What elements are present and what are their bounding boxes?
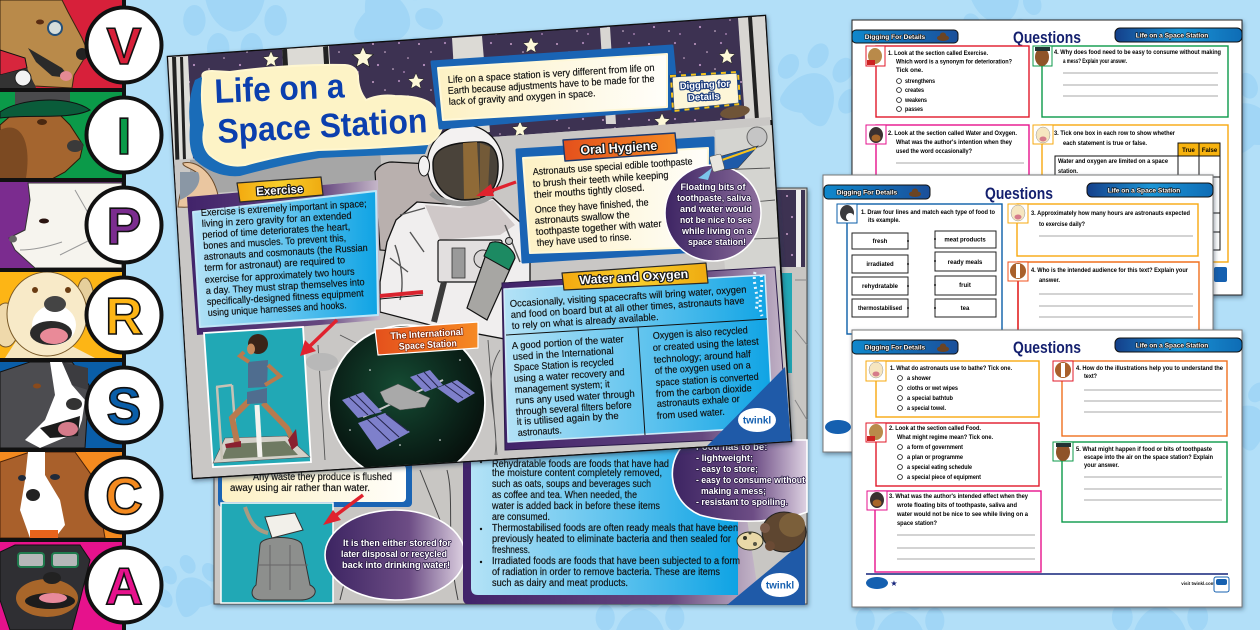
- question 3: [1008, 204, 1198, 256]
- toilet text box: away using air rather than water.: [230, 483, 370, 494]
- question 2: [866, 423, 1039, 486]
- oral hygiene text: astronauts swallow the: [534, 210, 631, 227]
- question 3: 3. Approximately how many hours are astronauts expected: [1031, 210, 1190, 217]
- exercise text: bones and muscles. To prevent this,: [203, 233, 346, 252]
- header: Life on a Space Station: [1115, 28, 1242, 42]
- water intro text: [510, 285, 747, 332]
- oxygen column: from used water.: [657, 407, 725, 422]
- purple fact circle: while living on a: [681, 226, 753, 237]
- question 2: [866, 125, 1029, 185]
- food panel: Thermostabilised foods are often ready meals that have been: [492, 523, 738, 534]
- food panel: [463, 440, 760, 604]
- water column: astronauts.: [518, 425, 562, 439]
- worksheet 1: [852, 20, 1242, 295]
- question 1: matching: ready meals: [948, 260, 983, 266]
- title cloud: [189, 65, 443, 176]
- question 3: to exercise daily?: [1039, 221, 1085, 228]
- purple fact circle: [665, 165, 761, 261]
- exercise text: [201, 199, 368, 319]
- bicep arm: [178, 162, 218, 207]
- exercise panel: [187, 177, 380, 335]
- toilet picture: [221, 503, 333, 603]
- water column: it is utilised again by the: [517, 411, 620, 428]
- food panel: freshness.: [492, 545, 530, 556]
- question 1: [866, 361, 1039, 417]
- header: Digging For Details: [852, 30, 958, 43]
- question 5: your answer.: [1084, 462, 1119, 469]
- water and oxygen panel: [502, 263, 788, 450]
- question 3 with true/false table: 3. Tick one box in each row to show whether: [1054, 130, 1176, 137]
- question 4: 4. Who is the intended audience for this text? Explain your: [1031, 267, 1189, 274]
- water and oxygen heading: Water and Oxygen: [579, 267, 689, 287]
- intro box: Earth because adjustments have to be made for the: [448, 74, 655, 97]
- machinery background: [172, 117, 791, 478]
- oxygen column: from the carbon dioxide: [656, 383, 753, 400]
- letter V: V: [107, 18, 142, 76]
- oval: stored or recycled: back into drinking water!: [342, 560, 450, 571]
- oval: food has to be: making a mess;: [701, 486, 766, 497]
- oral hygiene text: their mouths tightly closed.: [533, 183, 645, 201]
- oxygen column: [653, 325, 759, 422]
- question 2: a form of government: [907, 444, 963, 451]
- question 1: cloths or wet wipes: [907, 385, 958, 392]
- letter P: [86, 188, 162, 262]
- header: Life on a Space Station: Life on a Space Station: [1108, 188, 1180, 194]
- band S: collie: [0, 362, 122, 448]
- badge: Digging for Details: [671, 72, 751, 121]
- title text: Life on a: [214, 67, 346, 111]
- oval: food has to be: [672, 440, 807, 521]
- question 1: matching: thermostabilised: [858, 306, 902, 312]
- oral hygiene text: they have used to rinse.: [536, 232, 632, 249]
- splash: [754, 272, 762, 316]
- oral hygiene text: [532, 156, 693, 249]
- toothpaste tube: [698, 146, 758, 180]
- letter I: I: [117, 108, 131, 166]
- twinkl corner: twinkl: [766, 580, 794, 592]
- question 2: a special piece of equipment: [907, 474, 981, 481]
- letter C: C: [105, 468, 143, 526]
- twinkl corner: [727, 540, 805, 605]
- question 1: 1. What do astronauts use to bathe? Tick one.: [890, 365, 1012, 372]
- heading: Questions: Questions: [985, 184, 1053, 203]
- worksheet footer: ★: [890, 579, 898, 588]
- ISS circle: [329, 325, 485, 481]
- water column: runs any used water through: [516, 389, 635, 407]
- exercise heading: [237, 177, 323, 202]
- poster 1 (front): [168, 16, 791, 481]
- title text: [216, 76, 426, 149]
- twinkl corner: [707, 367, 791, 446]
- worksheet footer: [866, 574, 1229, 592]
- water column: [512, 334, 635, 439]
- question 5: 5. What might happen if food or bits of toothpaste: [1076, 446, 1213, 453]
- question 4: [1008, 262, 1199, 334]
- question 2: a plan or programme: [907, 454, 964, 461]
- question 1: matching: rehydratable: [862, 284, 899, 290]
- band V: terrier: [0, 0, 122, 88]
- purple fact circle: not be nice to see: [680, 215, 752, 226]
- question 1: matching: tea: [961, 306, 970, 312]
- band C: spaniel: [0, 452, 122, 538]
- question 4: [1033, 46, 1228, 117]
- band R: golden retriever: [0, 272, 122, 358]
- intro box: Life on a space station is very different from life on: [448, 63, 655, 86]
- intro box: lack of gravity and oxygen in space.: [449, 88, 596, 108]
- question 2: 2. Look at the section called Water and Oxygen.: [888, 130, 1017, 137]
- oral hygiene heading: Oral Hygiene: [580, 139, 658, 157]
- worksheet 2: [823, 175, 1213, 452]
- water column: Space Station is recycled: [514, 357, 614, 374]
- VIPERS dog strip: [0, 0, 162, 630]
- twinkl corner: twinkl: [743, 416, 771, 426]
- question 3: wrote floating bits of toothpaste, saliva and: [896, 502, 1017, 509]
- question 1: matching: meat products: [944, 238, 986, 244]
- question 1: weakens: [904, 97, 927, 104]
- header: Life on a Space Station: [1087, 183, 1213, 197]
- purple fact circle: space station!: [688, 237, 746, 248]
- poster 2 (behind): [214, 188, 807, 605]
- starfield window band: [168, 16, 772, 478]
- oral hygiene heading: [563, 133, 677, 161]
- question 1: strengthens: [905, 78, 935, 85]
- header: Life on a Space Station: Life on a Space Station: [1136, 342, 1208, 350]
- toilet text box: [218, 462, 412, 507]
- question 4: 4. How do the illustrations help you to understand the: [1076, 365, 1224, 372]
- ISS label: The International: [390, 327, 464, 342]
- question 1: [866, 46, 1029, 117]
- question 1: a shower: [907, 375, 932, 382]
- food panel: the moisture content completely removed,: [492, 468, 662, 479]
- oral hygiene text: to brush their teeth while keeping: [532, 170, 669, 190]
- oval: stored or recycled: later disposal or recycled: [341, 549, 447, 560]
- exercise text: living in zero gravity for an extended: [202, 211, 352, 230]
- water column: using a water recovery and: [514, 367, 625, 385]
- oral hygiene text: Once they have finished, the: [534, 197, 649, 216]
- food panel: of radiation in order to remove bacteria. These are items: [492, 567, 720, 578]
- header: Digging For Details: [824, 185, 930, 199]
- ISS label: Space Station: [399, 338, 457, 353]
- question 2: What was the author's intention when they: [896, 139, 1013, 146]
- exercise heading: Exercise: [256, 184, 304, 198]
- header: Digging For Details: [852, 340, 958, 354]
- twinkl badge: [1214, 267, 1227, 282]
- band P: white dog: [0, 182, 122, 268]
- oxygen column: space station is converted: [656, 372, 759, 389]
- question 3 with true/false table: each statement is true or false.: [1063, 140, 1147, 147]
- oral hygiene text: toothpaste together with water: [535, 219, 663, 238]
- food panel: are consumed.: [492, 512, 550, 523]
- exercise text: using unique harnesses and hooks.: [208, 300, 347, 319]
- oral hygiene text: Astronauts use special edible toothpaste: [532, 156, 693, 178]
- question 3: 3. What was the author's intended effect when they: [889, 493, 1029, 500]
- oval: food has to be: Food has to be:: [696, 442, 767, 453]
- oval: food has to be: - easy to store;: [696, 464, 758, 475]
- question 2: used the word occasionally?: [896, 148, 972, 155]
- ISS label: [375, 322, 478, 355]
- question 1: Which word is a synonym for deterioration?: [896, 58, 1012, 66]
- oxygen column: of the oxygen used on a: [655, 360, 751, 377]
- question 1: creates: [905, 87, 924, 94]
- purple fact circle: Floating bits of: [680, 182, 746, 193]
- letter P: P: [107, 198, 141, 256]
- question 1: Tick one.: [896, 67, 923, 74]
- band A: rottweiler: [0, 542, 122, 630]
- question 1: matching: 1. Draw four lines and match each type of food to: [861, 209, 995, 216]
- question 1: passes: [905, 106, 923, 113]
- food panel: such as oats, soups and beverages such: [492, 479, 651, 490]
- food panel: water is added back in before these items: [491, 501, 660, 512]
- oval: food has to be: - resistant to spoiling.: [696, 497, 788, 508]
- oxygen column: Oxygen is also recycled: [653, 325, 748, 342]
- water column: through several filters before: [516, 400, 632, 418]
- letter R: R: [105, 288, 143, 346]
- water intro text: to rely on what is already available.: [512, 312, 659, 332]
- oxygen tank: [467, 238, 515, 320]
- oral hygiene box: [517, 133, 714, 262]
- water and oxygen heading: [562, 263, 708, 290]
- intro box: [432, 46, 678, 128]
- food panel: previously heated to eliminate bacteria and then sealed for: [492, 534, 732, 545]
- badge: Digging for Details: Details: [688, 91, 720, 104]
- question 3: water would not be nice to see while living on a: [896, 511, 1029, 518]
- letter S: [86, 368, 162, 442]
- question 3 with true/false table: True: [1182, 148, 1195, 154]
- question 1: matching: its example.: [868, 217, 900, 224]
- header: Life on a Space Station: [1115, 338, 1242, 352]
- question 1: matching: [837, 204, 1002, 334]
- oval: food has to be: - easy to consume without: [696, 475, 806, 486]
- exercise text: term for astronaut) are required to: [204, 255, 346, 274]
- exercise text: astronauts and cosmonauts (the Russian: [204, 243, 368, 263]
- question 2: 2. Look at the section called Food.: [889, 425, 981, 432]
- astronaut: [375, 125, 530, 340]
- letter A: [86, 548, 162, 622]
- question 1: a special bathtub: [907, 395, 953, 402]
- water column: used in the International: [513, 346, 614, 363]
- question 5: [1053, 442, 1227, 522]
- toilet text box: Any waste they produce is flushed: [253, 472, 392, 483]
- question 3 with true/false table: Water and oxygen are limited on a space: [1058, 158, 1169, 165]
- question 4: text?: [1084, 373, 1097, 380]
- twinkl badge: [825, 420, 851, 434]
- question 1: matching: fruit: [959, 283, 971, 289]
- header: Digging For Details: Digging For Details: [865, 34, 926, 41]
- purple fact circle: and water would: [680, 204, 752, 215]
- oval: stored or recycled: [325, 510, 465, 600]
- oxygen column: astronauts exhale or: [657, 394, 741, 410]
- treadmill picture: [204, 327, 311, 467]
- food pile: [737, 512, 806, 552]
- water column: management system; it: [515, 379, 610, 396]
- arrow to helmet: [476, 182, 516, 196]
- question 1: matching: irradiated: [866, 262, 894, 268]
- exercise text: period of time deteriorates the heart,: [202, 222, 350, 241]
- title text: Space Station: [216, 102, 428, 151]
- question 1: a special towel.: [907, 405, 946, 412]
- question 3 with true/false table: [1033, 125, 1228, 262]
- letter V: [86, 8, 162, 82]
- question 1: matching: fresh: [873, 239, 888, 245]
- header: Life on a Space Station: Life on a Space Station: [1136, 32, 1208, 40]
- oxygen column: or created using the latest: [653, 337, 759, 354]
- question 2: What might regime mean? Tick one.: [897, 434, 993, 441]
- exercise text: a day. They must strap themselves into: [206, 277, 365, 297]
- header: Digging For Details: Digging For Details: [865, 344, 926, 352]
- oval: stored or recycled: It is then either stored for: [343, 538, 451, 549]
- question 4: 4. Why does food need to be easy to consume without making: [1054, 49, 1221, 56]
- badge: Digging for Details: Digging for: [680, 79, 730, 92]
- question 3: space station?: [897, 520, 937, 527]
- water column: A good portion of the water: [512, 334, 625, 352]
- heading: Questions: Questions: [1013, 28, 1081, 47]
- heading: Questions: Questions: [1013, 338, 1081, 357]
- food panel: Rehydratable foods are foods that have had: [492, 459, 669, 470]
- band I: hound with hat: [0, 92, 122, 180]
- water intro text: and food on board but at all other times, astronauts have: [511, 296, 745, 321]
- exercise text: exercise for approximately two hours: [205, 267, 355, 286]
- oval: food has to be: - lightweight;: [696, 453, 753, 464]
- question 3: [867, 491, 1041, 572]
- question 1: 1. Look at the section called Exercise.: [888, 50, 988, 57]
- question 2: a special eating schedule: [907, 464, 972, 471]
- oxygen column: technology; around half: [654, 349, 751, 366]
- food panel: Irradiated foods are foods that have been subjected to a form: [492, 556, 740, 567]
- worksheet footer: visit twinkl.com: [1181, 581, 1215, 586]
- question 3 with true/false table: False: [1202, 148, 1218, 154]
- arrow to treadmill: [300, 320, 337, 356]
- arrow to toilet: [323, 495, 363, 525]
- letter R: [86, 278, 162, 352]
- letter C: [86, 458, 162, 532]
- worksheet 3: [852, 330, 1242, 607]
- purple fact circle: toothpaste, saliva: [677, 193, 752, 204]
- question 3 with true/false table: station.: [1058, 168, 1078, 175]
- food panel: as coffee and tea. When needed, the: [492, 490, 637, 501]
- question 4: answer.: [1039, 277, 1060, 284]
- exercise text: specifically-designed fitness equipment: [207, 288, 364, 308]
- letter A: A: [105, 558, 143, 616]
- letter I: [86, 98, 162, 172]
- question 4: [1053, 361, 1227, 436]
- question 5: escape into the air on the space station? Explain: [1084, 454, 1213, 461]
- header: Digging For Details: Digging For Details: [837, 190, 898, 196]
- exercise text: Exercise is extremely important in space;: [201, 199, 367, 219]
- water intro text: Occasionally, visiting spacecrafts will bring water, oxygen: [510, 285, 747, 310]
- question 4: a mess? Explain your answer.: [1063, 58, 1127, 65]
- food panel: such as dairy and meat products.: [492, 578, 628, 589]
- letter S: S: [107, 378, 141, 436]
